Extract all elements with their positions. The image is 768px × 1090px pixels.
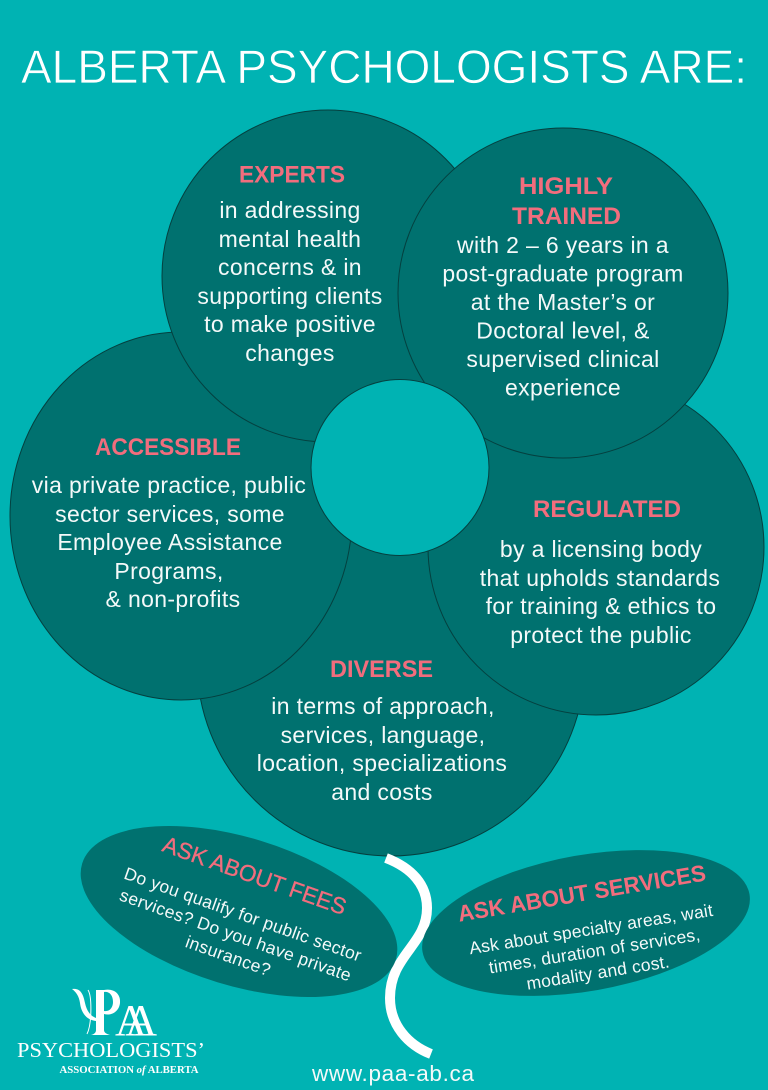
text: highly trained description: with 2 – 6 years in a [456, 232, 669, 258]
text: experts description: changes [245, 340, 335, 366]
heading: highly trained [512, 173, 621, 230]
text: fees description [107, 863, 364, 1007]
website: www.paa-ab.ca [311, 1061, 474, 1086]
text: highly trained description [442, 232, 684, 400]
text: services description: times, duration of services, [487, 924, 702, 977]
text: accessible description: Employee Assistance [57, 529, 283, 555]
logo [17, 989, 205, 1076]
text: experts description: in addressing [219, 197, 361, 223]
heading: experts: EXPERTS [239, 162, 345, 188]
heading: ask about services: ASK ABOUT SERVICES [456, 860, 708, 927]
heading: highly trained: TRAINED [512, 203, 621, 230]
text: experts description: supporting clients [197, 283, 383, 309]
text: association of alberta: ASSOCIATION of ALBERTA [60, 1065, 199, 1076]
heading: accessible: ACCESSIBLE [95, 434, 241, 461]
text: experts description: to make positive [204, 311, 376, 337]
text: services description: Ask about specialty areas, wait [468, 900, 714, 958]
text: psychologists: PSYCHOLOGISTS’ [17, 1038, 205, 1062]
text: fees description: insurance? [183, 932, 274, 980]
panel: experts circle [162, 110, 494, 442]
panel: ask about services [411, 827, 761, 1019]
text: diverse description [257, 693, 507, 805]
heading: regulated: REGULATED [533, 496, 681, 523]
panel: diverse circle [197, 468, 585, 856]
text: experts description: mental health [219, 226, 361, 252]
text: highly trained description: experience [505, 374, 621, 400]
panel: highly trained circle [398, 128, 728, 458]
text: diverse description: and costs [331, 779, 433, 805]
text: accessible description: Programs, [114, 558, 224, 584]
text: highly trained description: post-graduate program [442, 260, 684, 286]
heading: ask about fees: ASK ABOUT FEES [159, 831, 350, 920]
text: regulated description: by a licensing body [500, 536, 702, 562]
text: accessible description: & non-profits [106, 586, 240, 612]
icon: psi and PAA monogram [72, 989, 157, 1045]
text: experts description: concerns & in [218, 254, 362, 280]
text: experts description [197, 197, 383, 366]
text: regulated description: protect the public [510, 622, 692, 648]
panel: accessible circle [10, 332, 352, 700]
text: regulated description [480, 536, 720, 648]
text: fees description: services? Do you have private [117, 885, 354, 985]
heading: highly trained: HIGHLY [519, 173, 613, 200]
text: regulated description: for training & ethics to [486, 593, 716, 619]
text: accessible description [32, 472, 306, 612]
panel: ask about fees [61, 793, 417, 1030]
text: diverse description: location, specializations [257, 750, 507, 776]
text: highly trained description: supervised clinical [466, 346, 660, 372]
text: highly trained description: at the Master’s or [471, 289, 655, 315]
text: diverse description: services, language, [281, 722, 485, 748]
title: ALBERTA PSYCHOLOGISTS ARE: [21, 41, 747, 94]
panel: regulated circle [428, 379, 764, 715]
center circle [311, 380, 489, 556]
text: services description [468, 900, 721, 1002]
text: highly trained description: Doctoral level, & [476, 318, 650, 344]
text: services description: modality and cost. [525, 951, 671, 994]
text: diverse description: in terms of approach, [271, 693, 495, 719]
text: fees description: Do you qualify for public sector [122, 863, 364, 966]
text: accessible description: sector services, some [55, 501, 285, 527]
heading: diverse: DIVERSE [330, 656, 433, 683]
text: regulated description: that upholds standards [480, 565, 720, 591]
text: accessible description: via private practice, public [32, 472, 306, 498]
icon: psi and PAA monogram: AA [115, 996, 157, 1045]
flower stem [386, 858, 431, 1054]
